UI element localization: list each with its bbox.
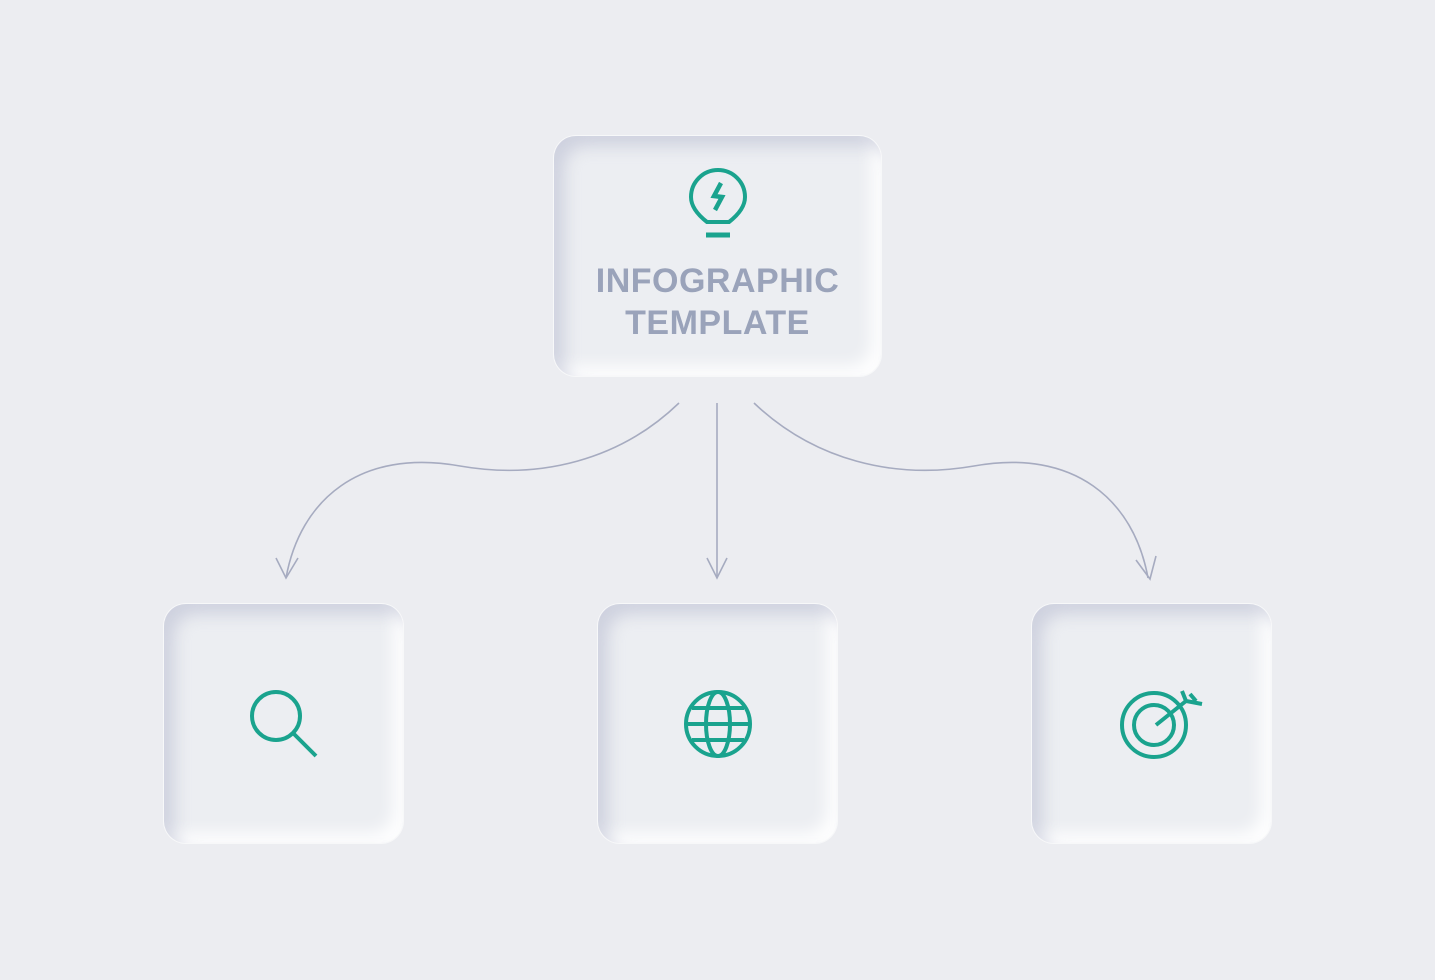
icon: target — [1120, 690, 1202, 759]
title text — [596, 262, 839, 342]
title text: INFOGRAPHIC — [596, 262, 839, 300]
top box: infographic template — [554, 136, 881, 376]
icon: magnifier — [250, 690, 318, 758]
title text: TEMPLATE — [625, 304, 810, 342]
box: target — [1032, 604, 1271, 843]
icon: globe — [684, 690, 752, 758]
box: search — [164, 604, 403, 843]
box: globe — [598, 604, 837, 843]
icon: lightbulb — [689, 168, 747, 238]
